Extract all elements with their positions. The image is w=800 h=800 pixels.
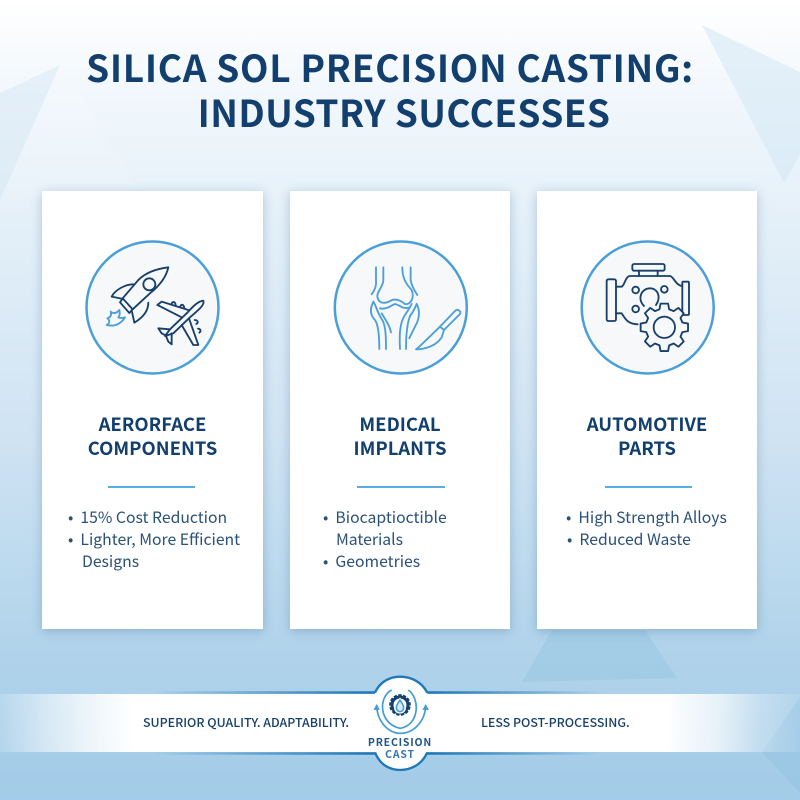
footer band xyxy=(0,694,800,752)
bullet list: • Lighter, More Efficient xyxy=(68,527,240,550)
bullet list: Materials xyxy=(336,527,403,550)
bullet list xyxy=(566,505,727,550)
bullet list: • High Strength Alloys xyxy=(566,505,727,528)
footer text right: LESS POST-PROCESSING. xyxy=(481,713,630,731)
icon: engine and gear xyxy=(580,240,715,375)
bullet list xyxy=(68,505,240,572)
heading: COMPONENTS xyxy=(88,435,217,461)
divider xyxy=(357,486,445,488)
heading xyxy=(353,411,447,461)
divider xyxy=(108,486,195,488)
bullet list: • Reduced Waste xyxy=(567,527,691,550)
bullet list xyxy=(323,505,447,572)
bullet list: Designs xyxy=(82,549,139,572)
title: SILICA SOL PRECISION CASTING: xyxy=(86,39,694,93)
logo wordmark xyxy=(368,735,432,762)
panel: automotive parts xyxy=(537,191,757,629)
heading xyxy=(586,411,707,461)
bullet list: • Biocaptioctible xyxy=(323,505,447,528)
heading: AUTOMOTIVE xyxy=(587,411,707,437)
panel: aerospace components xyxy=(42,191,263,629)
heading: PARTS xyxy=(618,435,676,461)
footer text left: SUPERIOR QUALITY. ADAPTABILITY. xyxy=(143,713,349,731)
logo wordmark: PRECISION xyxy=(368,735,432,750)
icon: knee joint and scalpel xyxy=(334,240,468,375)
bullet list: • 15% Cost Reduction xyxy=(68,505,227,528)
panel: medical implants xyxy=(290,191,510,629)
divider xyxy=(605,486,692,488)
title xyxy=(86,39,694,138)
bullet list: • Geometries xyxy=(323,549,420,572)
title: INDUSTRY SUCCESSES xyxy=(198,84,610,138)
logo wordmark: CAST xyxy=(385,747,415,762)
heading: IMPLANTS xyxy=(353,435,447,461)
logo badge xyxy=(164,676,590,772)
heading: MEDICAL xyxy=(359,411,441,437)
heading: AERORFACE xyxy=(99,411,206,437)
heading xyxy=(88,411,217,461)
icon: rocket and airplane xyxy=(85,240,220,375)
